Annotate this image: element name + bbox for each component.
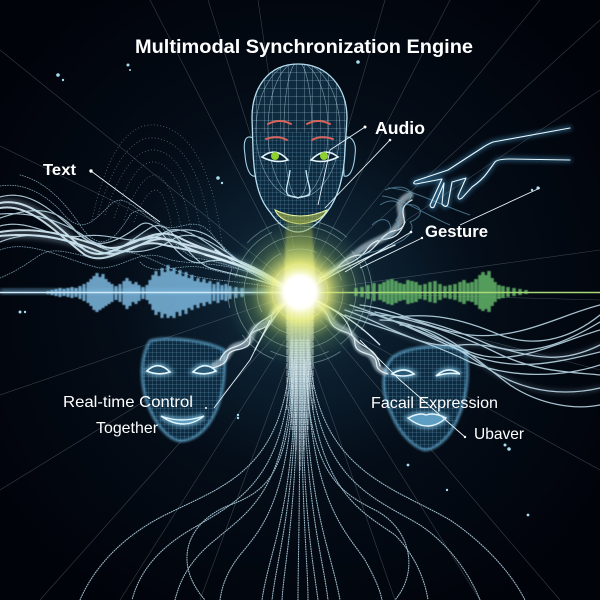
dotted arcs behind text wave (92, 125, 222, 245)
trunk strands (287, 300, 313, 470)
waveform green line (300, 292, 600, 294)
glowing hand (414, 128, 570, 208)
face fill (384, 346, 467, 450)
face: lower right (380, 342, 470, 452)
eyes (262, 152, 338, 161)
leader endpoints (89, 126, 466, 438)
face: top wireframe head (244, 60, 355, 232)
leader lines (91, 127, 540, 437)
mouth (275, 210, 327, 224)
waveform glow (0, 289, 285, 294)
brows (266, 121, 333, 140)
green waveform bars (356, 271, 526, 312)
label: Text: Text (43, 162, 77, 179)
vertical light trunk (286, 300, 314, 480)
eyes (392, 370, 460, 376)
text input waves (0, 175, 292, 292)
blue waveform bars (48, 265, 242, 318)
core glow (224, 216, 376, 368)
face outline glow (142, 339, 224, 441)
label: Gesture: Gesture (425, 223, 488, 241)
hand glow (414, 128, 570, 208)
face fill (142, 339, 224, 441)
bottom flowing strands (80, 340, 525, 600)
waveform center line (0, 292, 300, 294)
title: Multimodal Synchronization Engine (135, 37, 473, 58)
core star (283, 275, 317, 309)
lower right waves (345, 305, 600, 407)
audio waveform (0, 265, 600, 318)
head outline (252, 64, 347, 232)
twisted data ribbons (205, 195, 412, 374)
face grid (142, 339, 224, 441)
mouth (408, 414, 446, 426)
face grid (384, 346, 468, 450)
wire grid (250, 60, 350, 232)
label: Audio: Audio (375, 118, 425, 138)
hand line (414, 128, 570, 208)
label: Real-time Control: Real-time Control (63, 394, 193, 411)
gesture smoke hand (360, 187, 470, 258)
label: Facail Expression: Facail Expression (371, 395, 498, 412)
label: Together: Together (96, 420, 159, 437)
head fill (252, 64, 347, 232)
neck glow (284, 220, 316, 290)
ears (244, 137, 355, 176)
eyes glow (392, 370, 460, 426)
mouth (161, 416, 204, 424)
face outline glow (384, 346, 467, 450)
nose (286, 170, 310, 198)
constellation dots (18, 60, 540, 516)
label: Ubaver: Ubaver (474, 426, 525, 443)
face: lower left (138, 336, 228, 442)
rings around core (228, 220, 372, 364)
eyes glow (147, 366, 216, 424)
eyes (147, 366, 216, 374)
